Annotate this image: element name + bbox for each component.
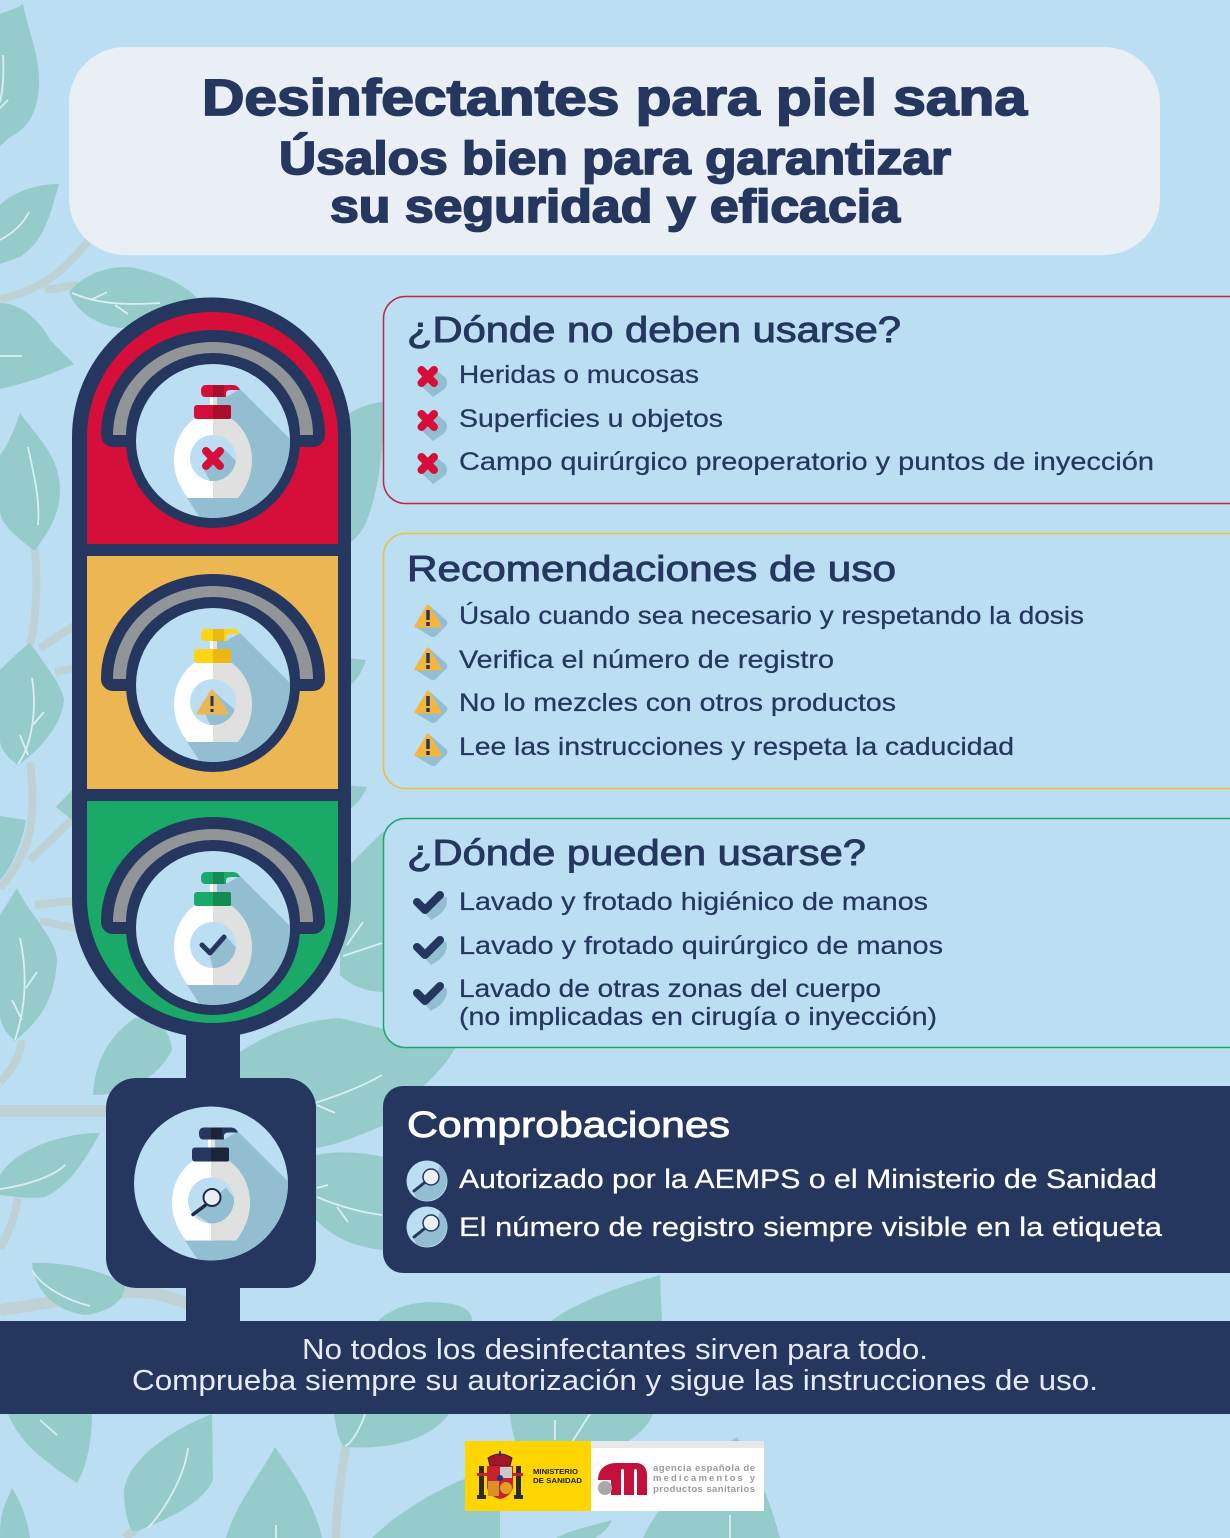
item 2: [416, 646, 834, 680]
item 1: [406, 1160, 1157, 1202]
footer line 1: No todos los desinfectantes sirven para todo.: [302, 1334, 928, 1366]
item 1: [417, 888, 928, 920]
red lamp: [87, 312, 338, 544]
heading: ¿Dónde no deben usarse?: [407, 309, 901, 350]
item 1: Úsalo cuando sea necesario y respetando la dosis: [459, 601, 1084, 630]
agency logo: agencia española de: [653, 1463, 755, 1474]
agency logo: productos sanitarios: [653, 1484, 755, 1495]
green lamp: [87, 801, 338, 1023]
lamp 2 hood and bottle: [113, 586, 313, 774]
ministry logo: MINISTERIO: [533, 1467, 578, 1476]
item 4: [416, 733, 1014, 766]
stem: [186, 1025, 240, 1325]
item 2: Verifica el número de registro: [459, 646, 834, 674]
ministry logo: DE SANIDAD: [533, 1476, 583, 1485]
housing: [72, 298, 351, 1038]
heading: Comprobaciones: [407, 1104, 730, 1145]
ministry logo: [465, 1441, 591, 1511]
panel: where to use: [384, 818, 1230, 1048]
amber lamp: [87, 556, 338, 789]
logos: [465, 1441, 764, 1511]
panel: checks: [383, 1086, 1230, 1273]
panel: where not to use: [384, 296, 1230, 504]
inspection module: [106, 1078, 316, 1288]
item 2: Lavado y frotado quirúrgico de manos: [459, 932, 943, 960]
subtitle line 2: su seguridad y eficacia: [330, 180, 900, 232]
item 2: [420, 405, 723, 441]
heading: ¿Dónde pueden usarse?: [407, 832, 866, 873]
item 1: [416, 601, 1084, 637]
item 2: [406, 1206, 1163, 1248]
item 2: El número de registro siempre visible en la etiqueta: [459, 1212, 1163, 1242]
item 1: [420, 361, 699, 397]
agency logo: medicamentos y: [653, 1473, 756, 1484]
item 2: [417, 932, 943, 965]
item 3: [417, 975, 937, 1031]
item 3: (no implicadas en cirugía o inyección): [459, 1003, 937, 1031]
item 1: Heridas o mucosas: [459, 361, 699, 389]
item 3: No lo mezcles con otros productos: [459, 689, 896, 717]
item 3: Campo quirúrgico preoperatorio y puntos de inyección: [459, 448, 1154, 476]
heading: Recomendaciones de uso: [407, 548, 896, 589]
item 2: Superficies u objetos: [459, 405, 723, 433]
item 1: Lavado y frotado higiénico de manos: [459, 888, 928, 916]
background leaves and stems: [0, 4, 780, 1538]
footer band: [0, 1321, 1230, 1414]
lamp 3 hood and bottle: [113, 829, 313, 1017]
item 3: [416, 689, 896, 723]
item 3: [420, 448, 1154, 484]
traffic light: [72, 298, 351, 1325]
subtitle line 1: Úsalos bien para garantizar: [279, 132, 951, 184]
lamp 1 hood and bottle: [113, 342, 313, 530]
item 1: Autorizado por la AEMPS o el Ministerio de Sanidad: [459, 1164, 1157, 1194]
item 4: Lee las instrucciones y respeta la caducidad: [459, 733, 1014, 761]
title panel: [69, 47, 1160, 255]
item 3: Lavado de otras zonas del cuerpo: [459, 975, 881, 1003]
panel: usage recommendations: [384, 534, 1230, 788]
agency logo: [591, 1441, 764, 1511]
title: Desinfectantes para piel sana: [202, 69, 1028, 126]
footer line 2: Comprueba siempre su autorización y sigue las instrucciones de uso.: [132, 1365, 1098, 1397]
